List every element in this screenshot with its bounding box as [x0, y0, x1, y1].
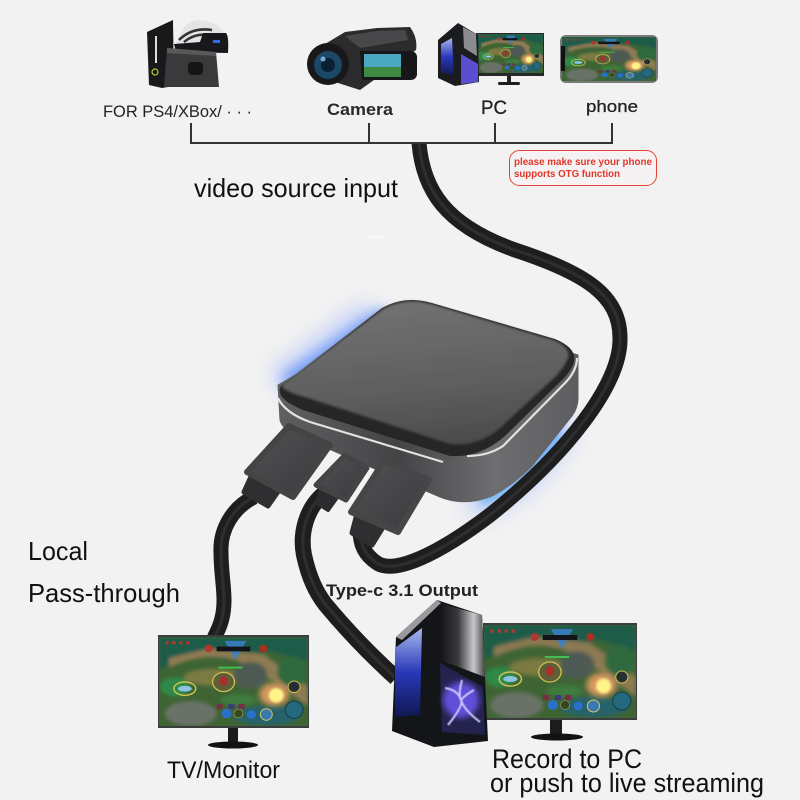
label: phone: phone	[586, 97, 638, 116]
icon: Switch dock	[164, 48, 219, 87]
label: video source input: video source input	[194, 173, 399, 203]
device top lid	[280, 300, 574, 456]
connector: Type-C	[316, 455, 367, 510]
record monitor	[483, 623, 637, 740]
PC tower	[392, 600, 488, 747]
icon: video camera	[307, 27, 417, 90]
icon: PC and monitor	[438, 23, 544, 86]
connector: HDMI left	[244, 426, 330, 506]
callout: OTG note	[510, 150, 656, 186]
label: consoles: FOR PS4/XBox/ · · ·	[103, 102, 252, 121]
icon: VR headset	[174, 20, 228, 53]
label: local pass-through: Local	[28, 536, 88, 566]
TV monitor	[158, 635, 309, 748]
cable: local pass-through to monitor	[214, 497, 254, 638]
label: PC: PC	[481, 98, 507, 119]
label: TV/Monitor: TV/Monitor	[167, 757, 280, 784]
bracket lines: source inputs	[191, 123, 612, 143]
icon: Xbox	[147, 20, 174, 88]
cable: Type-c output to PC	[303, 492, 396, 678]
callout: OTG note: supports OTG function	[514, 169, 620, 180]
label: record or stream: or push to live streaming	[490, 768, 764, 798]
cable: video input to device	[360, 143, 620, 566]
icon: phone	[560, 35, 658, 83]
label: record or stream: Record to PC	[492, 744, 642, 774]
capture device	[278, 300, 578, 502]
device silver trim	[278, 358, 577, 462]
label: local pass-through	[28, 536, 180, 608]
device glow	[280, 312, 581, 507]
callout: OTG note: please make sure your phone	[514, 157, 652, 168]
label: camera: Camera	[327, 100, 394, 119]
connector: USB right	[351, 461, 429, 545]
label: record or stream	[490, 744, 764, 798]
device body	[278, 305, 578, 502]
label: Type-c output: Type-c 3.1 Output	[326, 581, 478, 600]
icon: camera flip screen	[360, 51, 417, 80]
icon: consoles	[147, 20, 228, 88]
label: local pass-through: Pass-through	[28, 578, 180, 608]
